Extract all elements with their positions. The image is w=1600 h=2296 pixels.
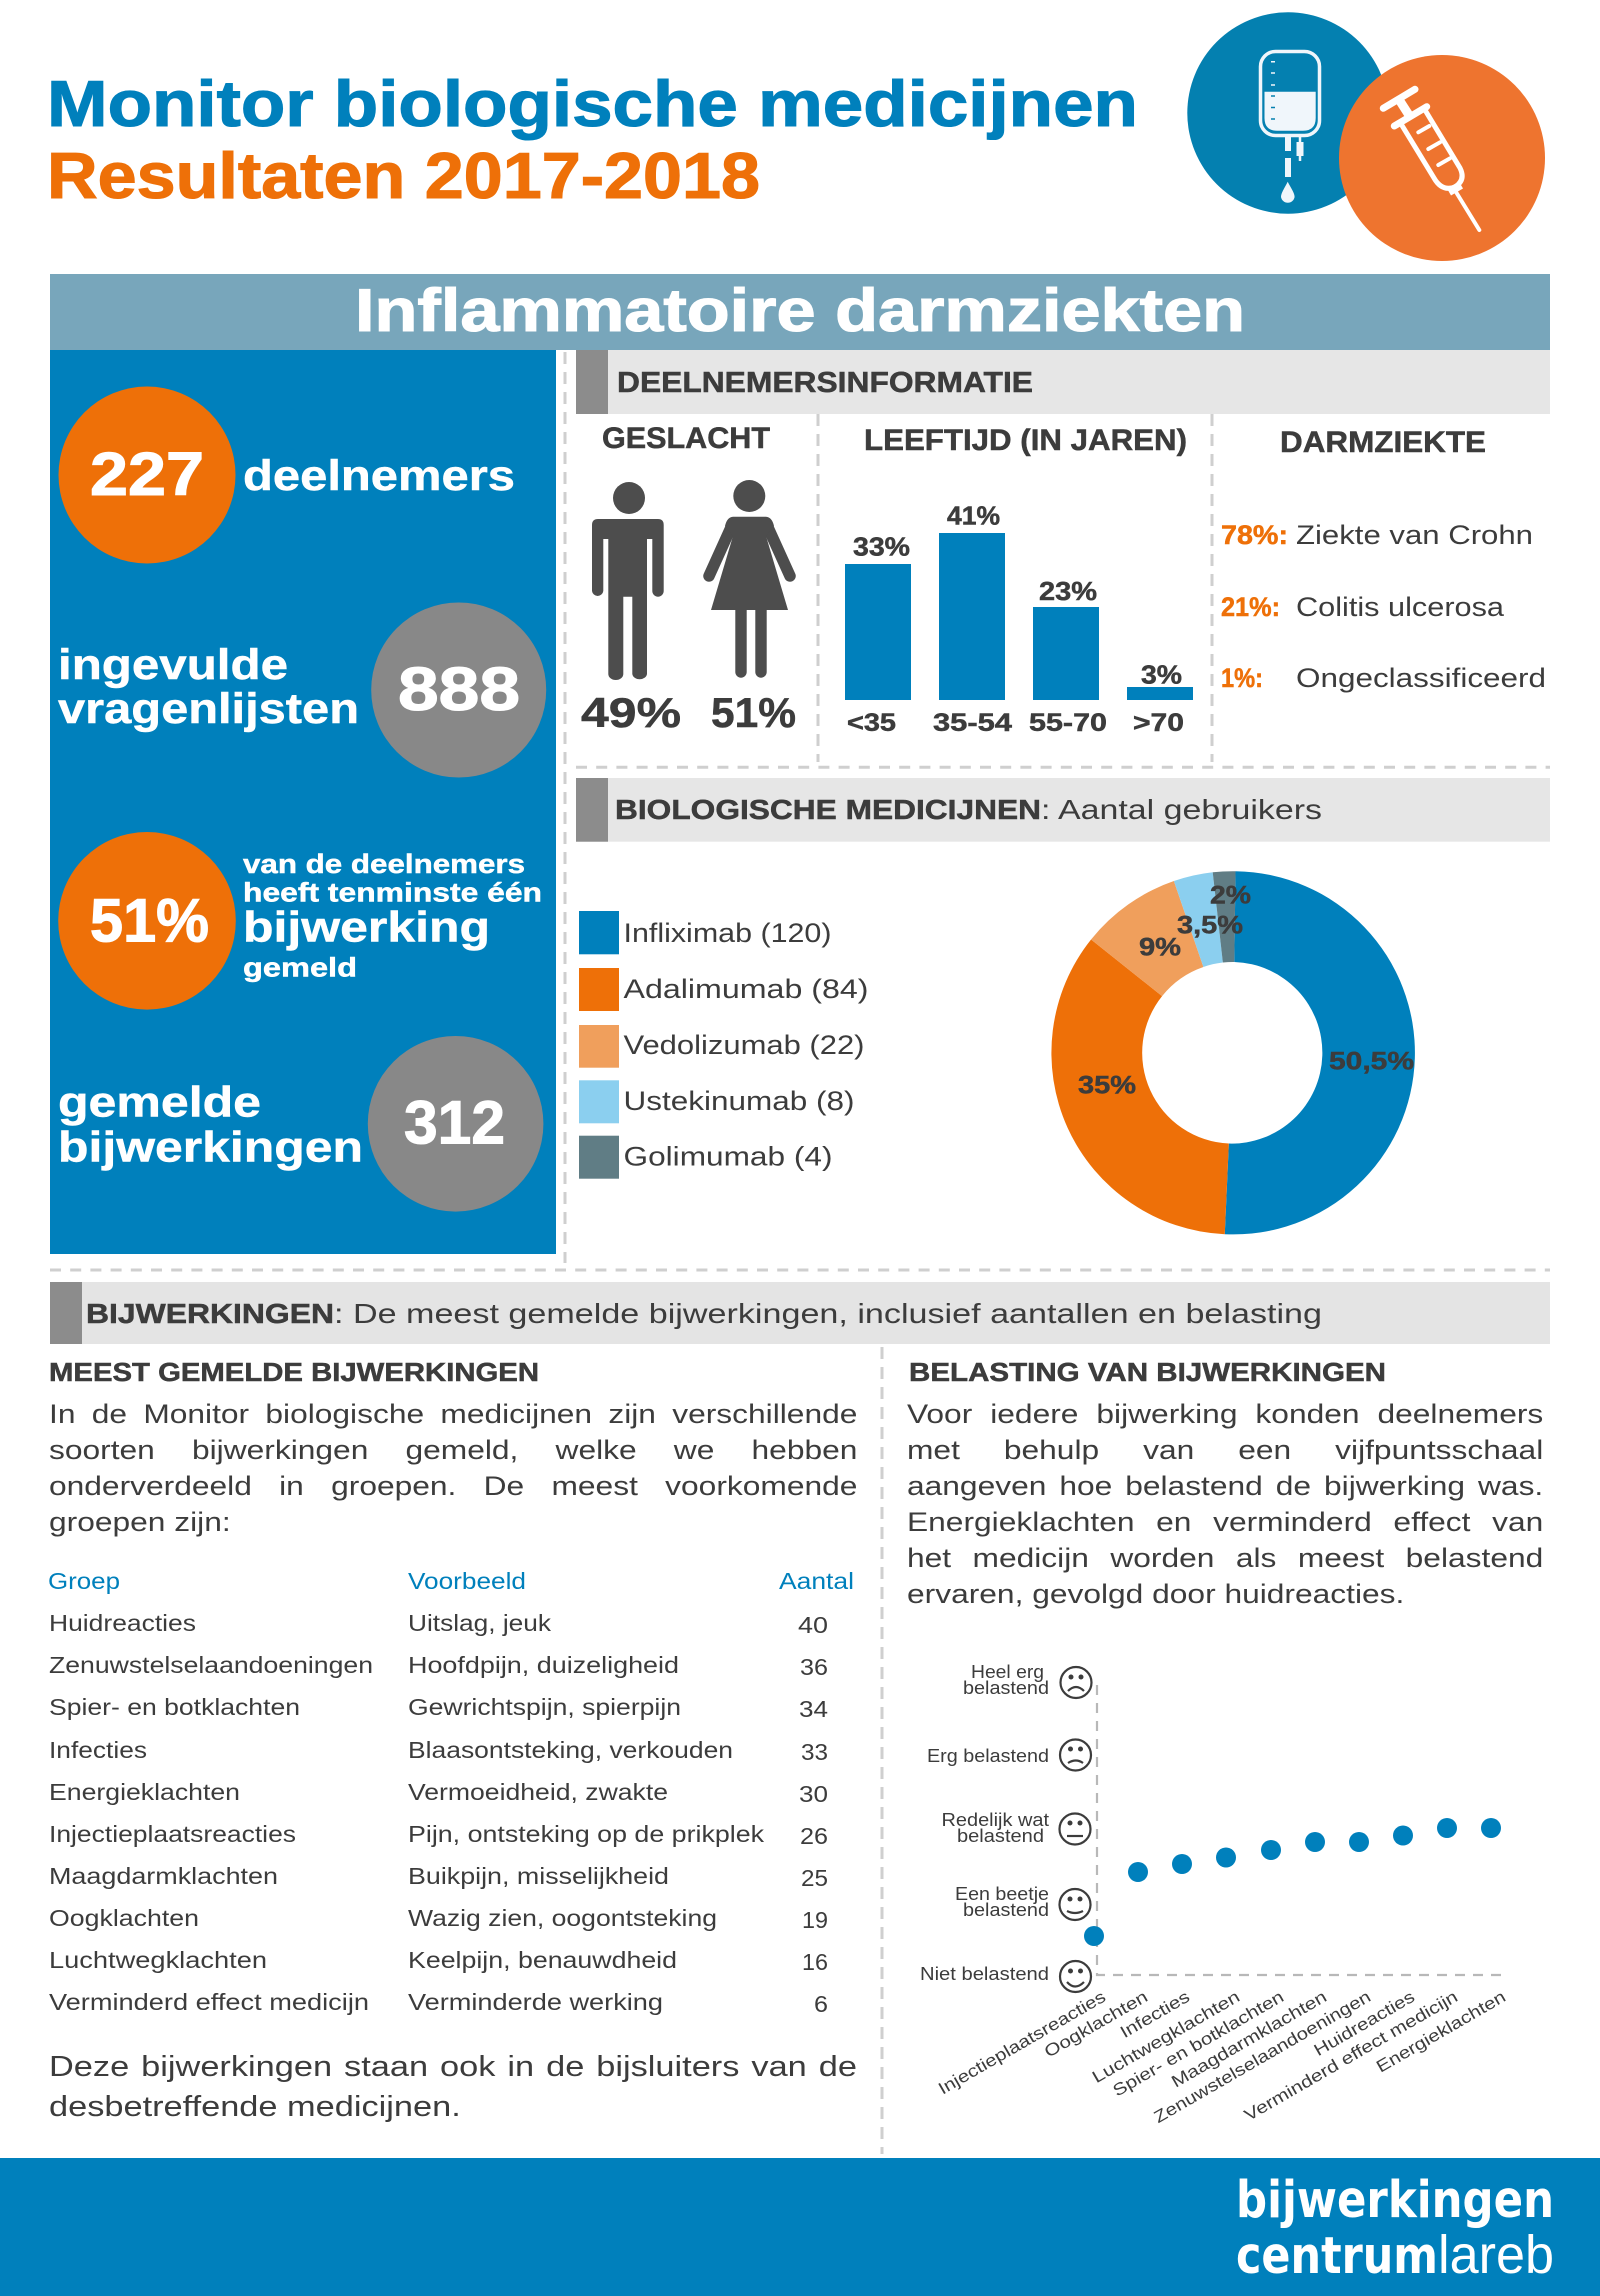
bar chart: leeftijd: LEEFTIJD (IN JAREN) (864, 424, 1187, 457)
table: bijwerkingen per groep: Verminderd effect medicijn (49, 1989, 369, 2015)
bar chart: leeftijd: 3% (1141, 660, 1182, 690)
text block: bijsluiters: Deze bijwerkingen staan ook in de bijsluiters van de (49, 2051, 857, 2083)
stat: 51% bijwerking: 51% (90, 887, 209, 955)
table: bijwerkingen per groep: 25 (801, 1865, 828, 1891)
title: Resultaten 2017-2018 (47, 139, 760, 212)
panel: darmziekte: DARMZIEKTE (1280, 426, 1486, 459)
bar chart: leeftijd: <35 (847, 709, 896, 737)
text block: belasting uitleg: Energieklachten en verminderd effect van (907, 1507, 1543, 1537)
y-axis labels: belastend (957, 1826, 1044, 1846)
legend: medicijnen: Golimumab (4) (624, 1141, 832, 1171)
table: bijwerkingen per groep: Gewrichtspijn, spierpijn (408, 1694, 681, 1720)
text block: introductie bijwerkingen: onderverdeeld in groepen. De meest voorkomende (49, 1471, 857, 1501)
panel: darmziekte: Ongeclassificeerd (1296, 663, 1546, 693)
table: bijwerkingen per groep: 26 (800, 1823, 828, 1849)
panel: darmziekte: Ziekte van Crohn (1296, 520, 1533, 550)
legend: medicijnen: Adalimumab (84) (624, 974, 868, 1004)
table: bijwerkingen per groep: Spier- en botklachten (49, 1694, 300, 1720)
table: bijwerkingen per groep: Blaasontsteking, verkouden (408, 1737, 733, 1763)
table: bijwerkingen per groep: Injectieplaatsreacties (49, 1821, 296, 1847)
y-axis labels (920, 1662, 1049, 1984)
table: bijwerkingen per groep: Buikpijn, misselijkheid (408, 1863, 669, 1889)
table: bijwerkingen per groep: Aantal (779, 1568, 854, 1594)
table: bijwerkingen per groep (48, 1568, 854, 2017)
x-axis labels: Oogklachten (1041, 1987, 1151, 2061)
text block: belasting uitleg: met behulp van een vijfpuntsschaal (907, 1435, 1543, 1465)
stat: 51% bijwerking: van de deelnemers (243, 849, 525, 879)
x-axis labels: Maagdarmklachten (1168, 1987, 1330, 2091)
panel: darmziekte: 21%: (1221, 592, 1280, 622)
stat: 888 ingevulde vragenlijsten (58, 602, 546, 778)
table: bijwerkingen per groep: Uitslag, jeuk (408, 1610, 551, 1636)
table: bijwerkingen per groep: 16 (802, 1949, 828, 1975)
stat: 888 ingevulde vragenlijsten: 888 (398, 655, 520, 723)
bar chart: leeftijd: 23% (1039, 576, 1097, 606)
panel: geslacht: 49% (581, 689, 681, 736)
stat: 312 gemelde bijwerkingen: bijwerkingen (58, 1123, 363, 1171)
y-axis labels: Heel erg (971, 1662, 1044, 1682)
footer with logo (0, 2158, 1600, 2296)
table: bijwerkingen per groep: 30 (799, 1781, 828, 1807)
header: Deelnemersinformatie (576, 350, 1550, 414)
legend: medicijnen: Ustekinumab (8) (624, 1086, 854, 1116)
table: bijwerkingen per groep: Wazig zien, oogontsteking (408, 1905, 717, 1931)
table: bijwerkingen per groep: Infecties (49, 1737, 147, 1763)
text block: belasting uitleg: aangeven hoe belastend de bijwerking was. (907, 1471, 1543, 1501)
x-axis labels: Injectieplaatsreacties (935, 1987, 1109, 2098)
y-axis labels: belastend (963, 1900, 1049, 1920)
table: bijwerkingen per groep: 19 (802, 1907, 828, 1933)
stat: 312 gemelde bijwerkingen: 312 (404, 1088, 505, 1156)
data points (1084, 1818, 1501, 1946)
stat: 888 ingevulde vragenlijsten: ingevulde (58, 641, 288, 689)
donut chart: aantal gebruikers: 2% (1210, 881, 1251, 909)
icon: syringe (1339, 55, 1545, 261)
table: bijwerkingen per groep: Vermoeidheid, zwakte (408, 1779, 668, 1805)
table: bijwerkingen per groep: Hoofdpijn, duizeligheid (408, 1652, 679, 1678)
legend: medicijnen: Vedolizumab (22) (624, 1030, 864, 1060)
icon: man (592, 482, 664, 680)
header: Bijwerkingen (50, 1282, 1550, 1344)
bar chart: leeftijd: 35-54 (933, 709, 1012, 737)
bar chart: leeftijd: 41% (947, 500, 1000, 530)
title (47, 67, 1138, 212)
table: bijwerkingen per groep: Groep (48, 1568, 120, 1594)
header: Deelnemersinformatie: DEELNEMERSINFORMATIE (617, 367, 1033, 399)
title: Monitor biologische medicijnen (47, 67, 1138, 140)
x-axis labels: Zenuwstelselaandoeningen (1151, 1987, 1374, 2127)
icon: infusion bag (1187, 12, 1389, 214)
icons: smileys (1060, 1667, 1092, 1992)
donut chart: aantal gebruikers: 50,5% (1329, 1047, 1414, 1075)
y-axis labels: Niet belastend (920, 1964, 1049, 1984)
panel: geslacht: GESLACHT (602, 422, 770, 455)
panel: darmziekte: 78%: (1221, 520, 1288, 550)
text block: belasting uitleg: ervaren, gevolgd door huidreacties. (907, 1579, 1404, 1609)
stat: 312 gemelde bijwerkingen: gemelde (58, 1079, 261, 1127)
text block: introductie bijwerkingen: soorten bijwerkingen gemeld, welke we hebben (49, 1435, 857, 1465)
stat: 227 deelnemers: 227 (90, 440, 204, 508)
x-axis labels: Spier- en botklachten (1109, 1987, 1287, 2100)
donut chart: aantal gebruikers: 35% (1078, 1071, 1136, 1099)
bar chart: leeftijd: >70 (1133, 709, 1184, 737)
table: bijwerkingen per groep: 36 (800, 1654, 828, 1680)
text block: belasting uitleg: het medicijn worden als meest belastend (907, 1543, 1543, 1573)
text block: introductie bijwerkingen: groepen zijn: (49, 1507, 231, 1537)
y-axis labels: Redelijk wat (942, 1810, 1049, 1830)
bar chart: leeftijd: 33% (853, 532, 910, 562)
x-axis labels (935, 1987, 1509, 2127)
legend: medicijnen (579, 911, 868, 1179)
heading: belasting van bijwerkingen: BELASTING VAN BIJWERKINGEN (909, 1357, 1386, 1387)
text block: belasting uitleg: Voor iedere bijwerking konden deelnemers (907, 1399, 1543, 1429)
header: Bijwerkingen: BIJWERKINGEN (86, 1298, 334, 1329)
header: Bijwerkingen: : De meest gemelde bijwerkingen, inclusief aantallen en belasting (334, 1298, 1322, 1329)
stat: 888 ingevulde vragenlijsten: vragenlijsten (58, 685, 359, 733)
panel: geslacht (581, 422, 796, 736)
stat: 227 deelnemers (58, 386, 515, 564)
footer with logo: bijwerkingen (1236, 2171, 1554, 2230)
table: bijwerkingen per groep: Pijn, ontsteking op de prikplek (408, 1821, 764, 1847)
y-axis labels: Erg belastend (927, 1746, 1049, 1766)
x-axis labels: Infecties (1117, 1987, 1193, 2042)
text block: introductie bijwerkingen: In de Monitor biologische medicijnen zijn verschillende (49, 1399, 857, 1429)
table: bijwerkingen per groep: Huidreacties (49, 1610, 196, 1636)
stat: 51% bijwerking (58, 832, 542, 1010)
header: Biologische medicijnen: BIOLOGISCHE MEDICIJNEN (615, 794, 1041, 825)
header: Biologische medicijnen (576, 778, 1550, 842)
stat: 312 gemelde bijwerkingen (58, 1036, 543, 1212)
stat: 51% bijwerking: heeft tenminste één (243, 877, 542, 907)
footer with logo: centrum (1236, 2227, 1438, 2286)
heading band: Inflammatoire darmziekten: Inflammatoire darmziekten (355, 277, 1245, 344)
text block: bijsluiters: desbetreffende medicijnen. (49, 2091, 461, 2123)
donut chart: aantal gebruikers: 3,5% (1177, 911, 1243, 939)
bar chart: leeftijd (845, 424, 1193, 737)
text block: bijsluiters (49, 2051, 857, 2123)
table: bijwerkingen per groep: 40 (798, 1612, 828, 1638)
table: bijwerkingen per groep: Oogklachten (49, 1905, 199, 1931)
panel: key figures (50, 350, 556, 1254)
heading band: Inflammatoire darmziekten (50, 274, 1550, 350)
donut chart: aantal gebruikers: 9% (1139, 933, 1181, 961)
stat: 51% bijwerking: bijwerking (243, 904, 490, 952)
y-axis labels: Een beetje (955, 1884, 1049, 1904)
table: bijwerkingen per groep: Zenuwstelselaandoeningen (49, 1652, 373, 1678)
table: bijwerkingen per groep: Verminderde werking (408, 1989, 663, 2015)
legend: medicijnen: Infliximab (120) (624, 918, 832, 948)
x-axis labels: Verminderd effect medicijn (1241, 1987, 1461, 2125)
y-axis labels: belastend (963, 1678, 1049, 1698)
panel: darmziekte: 1%: (1221, 663, 1263, 693)
text block: introductie bijwerkingen (49, 1399, 857, 1537)
x-axis labels: Luchtwegklachten (1089, 1987, 1243, 2087)
table: bijwerkingen per groep: 34 (799, 1696, 828, 1722)
chart: belasting per bijwerking (920, 1662, 1509, 2127)
stat: 227 deelnemers: deelnemers (243, 452, 515, 500)
icon: woman (709, 480, 790, 678)
table: bijwerkingen per groep: Energieklachten (49, 1779, 240, 1805)
table: bijwerkingen per groep: Voorbeeld (408, 1568, 526, 1594)
panel: geslacht: 51% (711, 689, 796, 736)
text block: belasting uitleg (907, 1399, 1543, 1609)
table: bijwerkingen per groep: 6 (814, 1991, 828, 2017)
table: bijwerkingen per groep: Keelpijn, benauwdheid (408, 1947, 677, 1973)
panel: darmziekte: Colitis ulcerosa (1296, 592, 1505, 622)
table: bijwerkingen per groep: Luchtwegklachten (49, 1947, 267, 1973)
donut chart: aantal gebruikers (1049, 869, 1417, 1237)
x-axis labels: Energieklachten (1373, 1987, 1509, 2076)
table: bijwerkingen per groep: 33 (801, 1739, 828, 1765)
header: Biologische medicijnen: : Aantal gebruikers (1041, 794, 1322, 825)
footer with logo: lareb (1438, 2225, 1554, 2285)
stat: 51% bijwerking: gemeld (243, 953, 357, 983)
bar chart: leeftijd: 55-70 (1029, 709, 1107, 737)
heading: meest gemelde bijwerkingen: MEEST GEMELDE BIJWERKINGEN (49, 1357, 539, 1387)
x-axis labels: Huidreacties (1311, 1987, 1418, 2060)
table: bijwerkingen per groep: Maagdarmklachten (49, 1863, 278, 1889)
panel: darmziekte (1221, 426, 1546, 693)
